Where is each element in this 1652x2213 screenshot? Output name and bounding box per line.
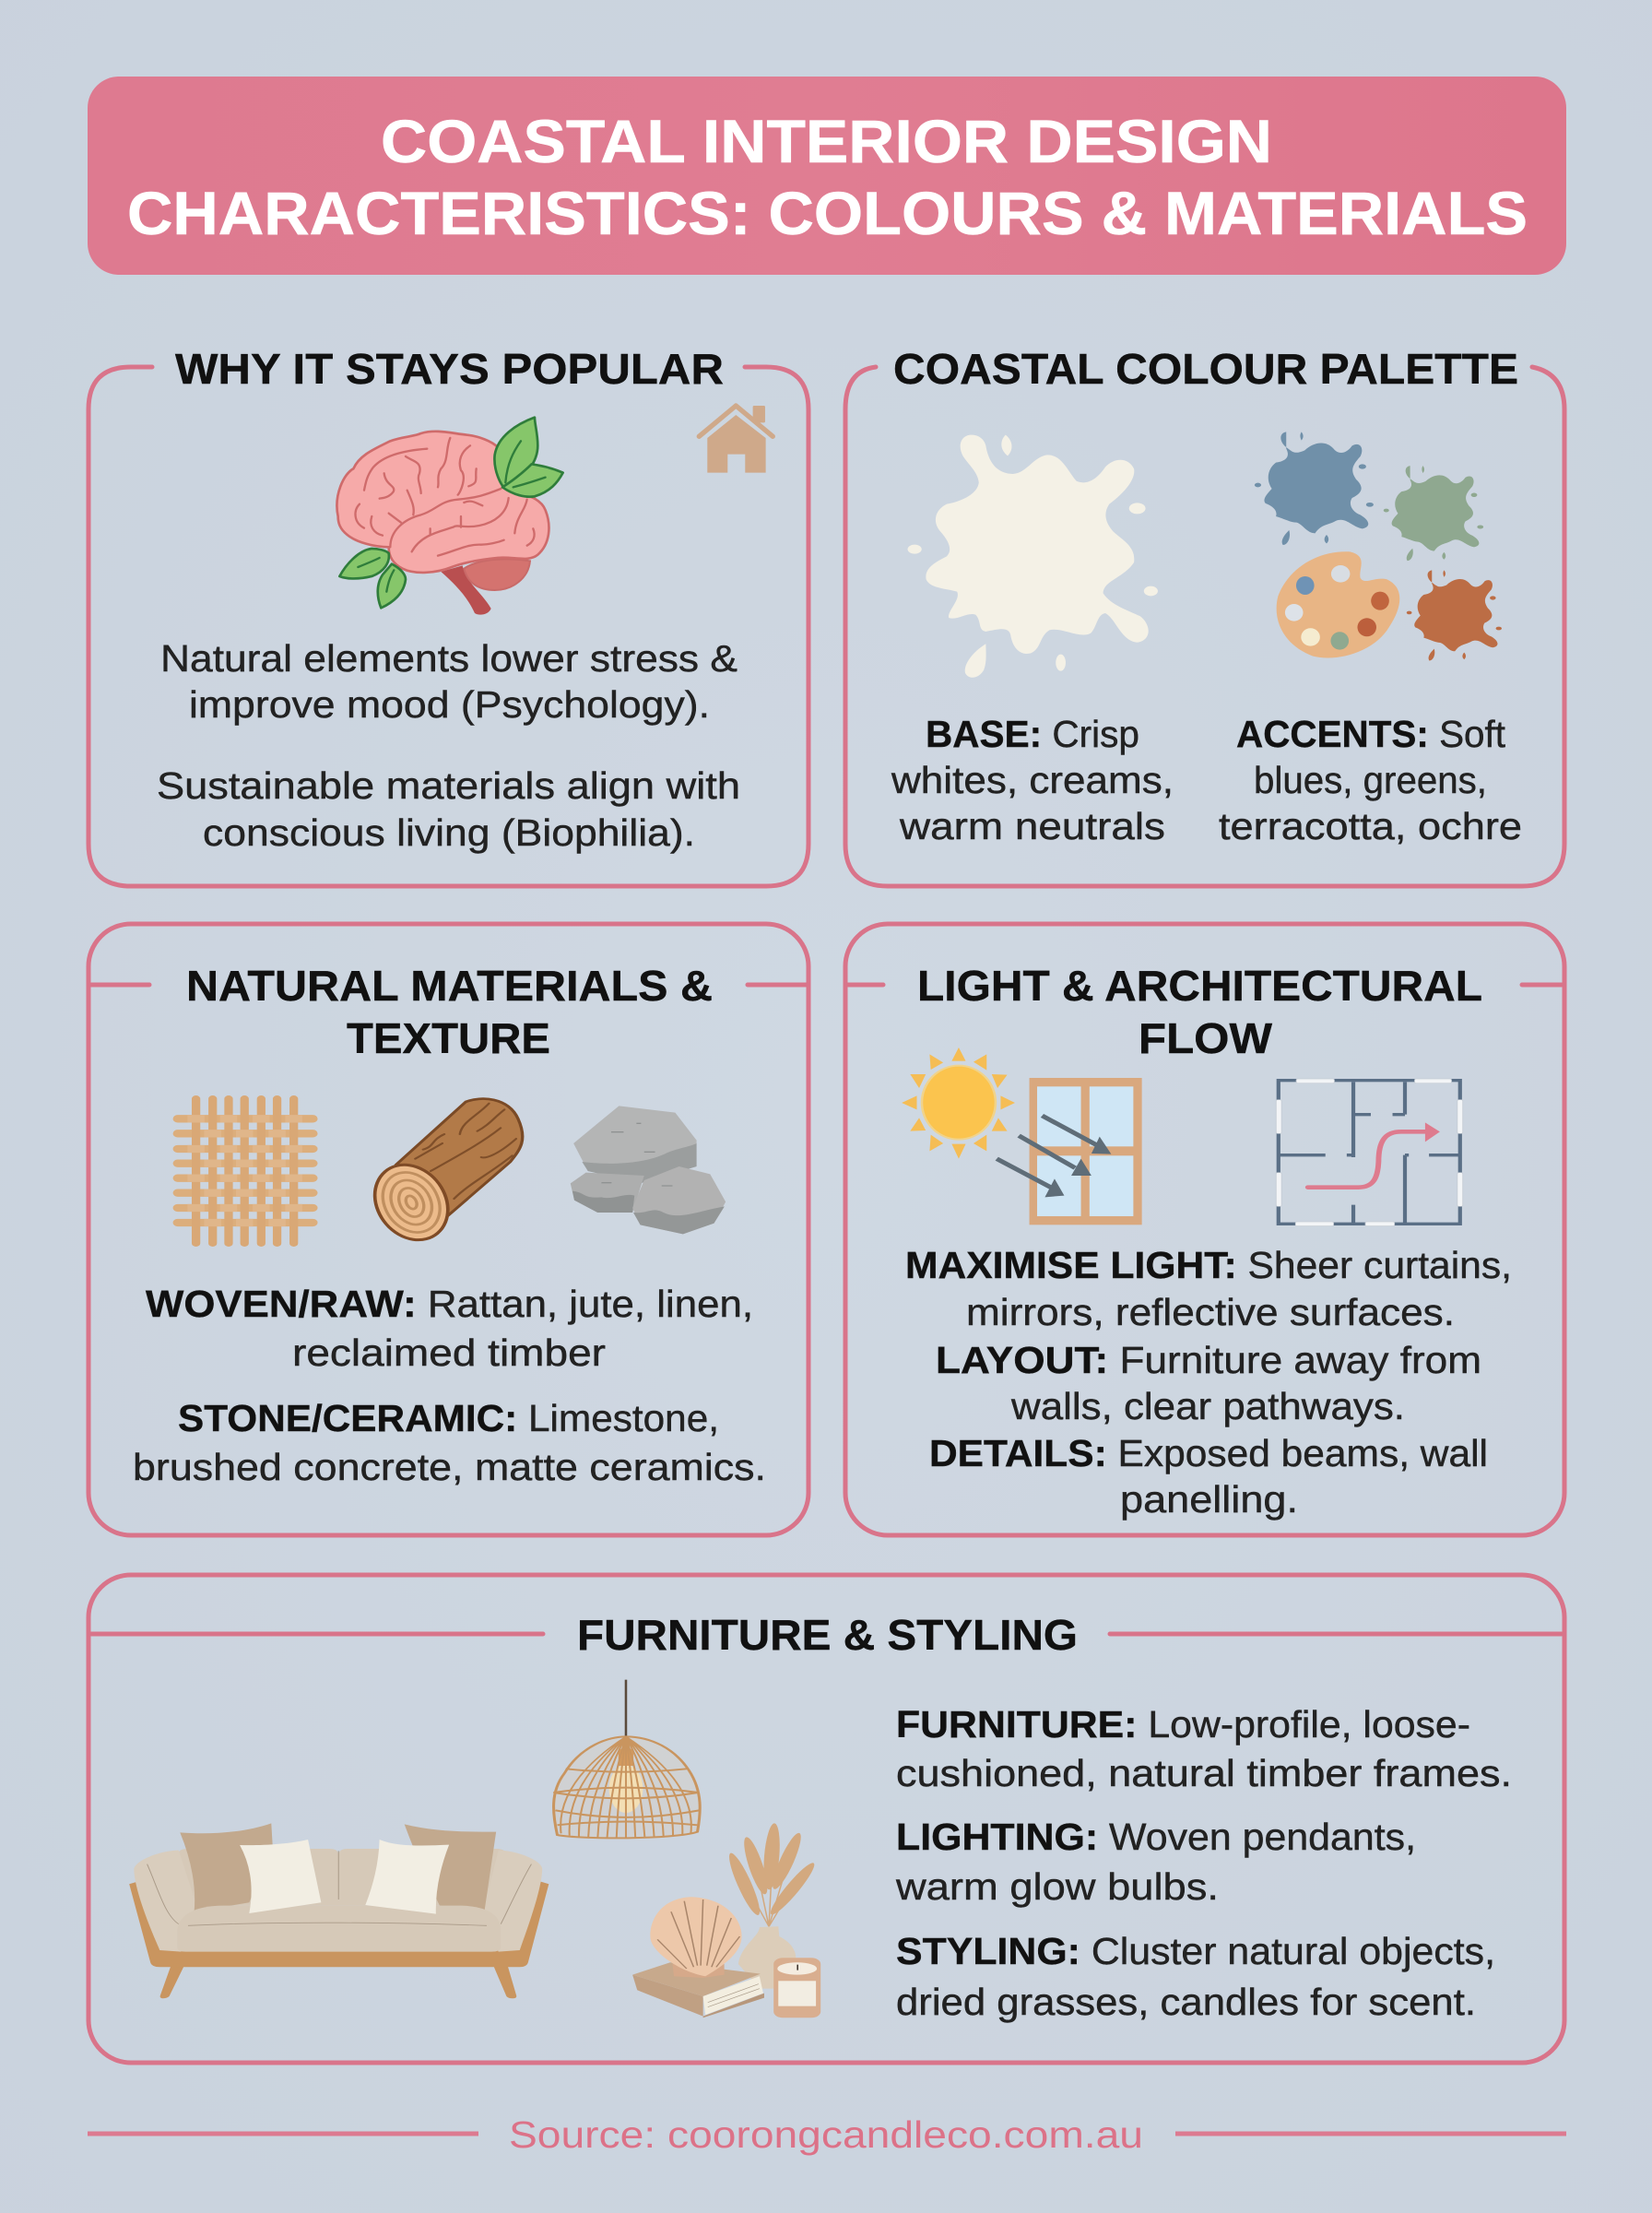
- text: accent colours: ACCENTS: Soft: [1236, 713, 1506, 755]
- text: accent colours: blues, greens,: [1254, 759, 1487, 801]
- icon: brain with leaves: [336, 418, 563, 615]
- text: woven and stone materials: reclaimed timber: [292, 1331, 606, 1374]
- text: light and layout details: LAYOUT: Furniture away from: [936, 1339, 1481, 1381]
- icon: house: [699, 406, 773, 473]
- text: base colours: [891, 713, 1174, 847]
- title text: COASTAL INTERIOR DESIGN: [381, 107, 1272, 175]
- text: furniture, lighting and styling: dried grasses, candles for scent.: [896, 1981, 1476, 2023]
- icon: sun and window: [902, 1047, 1142, 1225]
- text: why popular: improve mood (Psychology).: [189, 683, 710, 726]
- text: furniture, lighting and styling: cushioned, natural timber frames.: [896, 1752, 1512, 1794]
- title text: [127, 107, 1528, 247]
- text: furniture, lighting and styling: FURNITURE: Low-profile, loose-: [896, 1703, 1470, 1746]
- text: base colours: BASE: Crisp: [926, 713, 1139, 755]
- panel: furniture and styling: [88, 1575, 1564, 2063]
- icon: stones: [571, 1106, 726, 1234]
- text: woven and stone materials: STONE/CERAMIC: Limestone,: [178, 1397, 719, 1439]
- text: furniture, lighting and styling: [895, 1703, 1512, 2023]
- heading: light and architectural flow: LIGHT & ARCHITECTURAL: [917, 962, 1482, 1010]
- icon: sofa: [129, 1823, 549, 1998]
- text: light and layout details: DETAILS: Exposed beams, wall: [929, 1432, 1488, 1474]
- text: furniture, lighting and styling: STYLING: Cluster natural objects,: [896, 1930, 1495, 1972]
- footer source: Source: coorongcandleco.com.au: [509, 2113, 1143, 2156]
- icon: timber log: [363, 1099, 523, 1248]
- heading: coastal colour palette: COASTAL COLOUR PALETTE: [893, 345, 1518, 393]
- icon: woven rattan: [178, 1099, 313, 1243]
- text: woven and stone materials: brushed concrete, matte ceramics.: [133, 1446, 766, 1488]
- heading: why it stays popular: WHY IT STAYS POPULAR: [175, 345, 724, 393]
- heading: light and architectural flow: [917, 962, 1482, 1062]
- heading: natural materials and texture: TEXTURE: [347, 1014, 550, 1062]
- heading: natural materials and texture: NATURAL MATERIALS &: [186, 962, 713, 1010]
- text: furniture, lighting and styling: LIGHTING: Woven pendants,: [896, 1816, 1416, 1858]
- text: accent colours: terracotta, ochre: [1219, 805, 1522, 847]
- text: light and layout details: panelling.: [1120, 1478, 1298, 1521]
- text: why popular: conscious living (Biophilia).: [203, 811, 695, 854]
- title banner: [88, 77, 1566, 275]
- heading: light and architectural flow: FLOW: [1139, 1014, 1273, 1062]
- text: base colours: warm neutrals: [899, 805, 1165, 847]
- text: light and layout details: [905, 1244, 1512, 1521]
- text: woven and stone materials: WOVEN/RAW: Rattan, jute, linen,: [146, 1283, 753, 1325]
- panel: why it stays popular: [88, 345, 808, 886]
- text: base colours: whites, creams,: [891, 759, 1174, 801]
- panel: natural materials and texture: [88, 924, 808, 1535]
- icon: floor plan with flow arrow: [1276, 1079, 1463, 1226]
- icon: accent paint splats and palette: [1255, 432, 1502, 660]
- heading: furniture and styling: FURNITURE & STYLING: [577, 1611, 1078, 1659]
- icon: woven pendant lamp: [553, 1680, 700, 1838]
- text: why popular: [157, 637, 740, 854]
- text: light and layout details: mirrors, reflective surfaces.: [966, 1291, 1455, 1333]
- panel: coastal colour palette: [845, 345, 1564, 886]
- text: light and layout details: MAXIMISE LIGHT: Sheer curtains,: [905, 1244, 1512, 1286]
- text: light and layout details: walls, clear pathways.: [1010, 1385, 1405, 1427]
- heading: natural materials and texture: [186, 962, 713, 1062]
- title text: CHARACTERISTICS: COLOURS & MATERIALS: [127, 179, 1528, 247]
- text: woven and stone materials: [133, 1283, 766, 1488]
- icon: shell, book, vase and candle: [632, 1823, 820, 2018]
- text: why popular: Sustainable materials align with: [157, 764, 740, 807]
- text: accent colours: [1219, 713, 1522, 847]
- panel: light and architectural flow: [845, 924, 1564, 1535]
- icon: cream paint splat: [908, 435, 1158, 678]
- text: furniture, lighting and styling: warm glow bulbs.: [895, 1865, 1219, 1908]
- text: why popular: Natural elements lower stress &: [160, 637, 738, 680]
